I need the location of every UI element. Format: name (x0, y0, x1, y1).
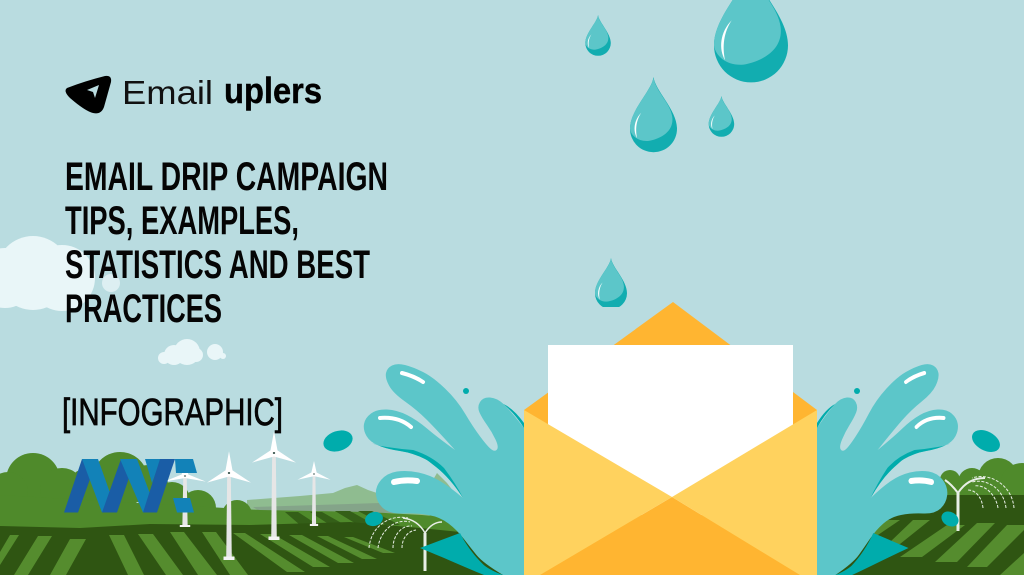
title: EMAIL DRIP CAMPAIGN (65, 155, 388, 199)
small drop right (709, 96, 734, 137)
distant grey band (253, 503, 400, 513)
envelope bottom panel (540, 497, 800, 575)
envelope (524, 302, 817, 575)
big drop (714, 0, 788, 82)
flying water blobs (321, 388, 1004, 530)
right water splash (817, 364, 958, 575)
right dark field (800, 495, 1024, 575)
envelope left panel (524, 410, 672, 575)
left sprinkler (369, 517, 442, 571)
title: STATISTICS AND BEST (65, 243, 370, 287)
right green hills (940, 458, 1024, 507)
envelope right panel (672, 410, 817, 575)
title: PRACTICES (65, 287, 222, 331)
turbine 2 (207, 451, 251, 560)
title: TIPS, EXAMPLES, (65, 199, 299, 243)
field stripes left (0, 532, 395, 575)
drop above envelope (595, 258, 627, 309)
back of envelope and flap (524, 302, 817, 575)
turbine 1 (164, 463, 206, 527)
small drop upper left (585, 15, 611, 56)
logo wordmark: Email: Email (122, 74, 213, 111)
turbine 4 (298, 461, 330, 526)
upper field shadow stripes (285, 511, 400, 525)
dark main field (0, 522, 540, 575)
large cloud at left (0, 236, 120, 311)
blue MT logo overlay (64, 459, 197, 512)
logo icon (66, 76, 111, 113)
left water splash (364, 364, 524, 575)
subtitle: infographic tag: [INFOGRAPHIC] (62, 392, 283, 434)
logo wordmark: uplers: uplers (224, 70, 322, 111)
turbine 3 (252, 431, 296, 540)
landscape (0, 452, 1024, 575)
title (65, 155, 388, 331)
medium drop (630, 77, 677, 152)
logo: Email uplers (66, 70, 322, 113)
small cloud (158, 339, 226, 365)
pale distant hills (247, 473, 460, 515)
wind turbines (164, 431, 330, 560)
white letter (548, 345, 793, 515)
water drops (585, 0, 788, 309)
right sprinkler (945, 477, 1014, 531)
right field stripes (862, 520, 1024, 575)
left green hills (0, 452, 540, 545)
